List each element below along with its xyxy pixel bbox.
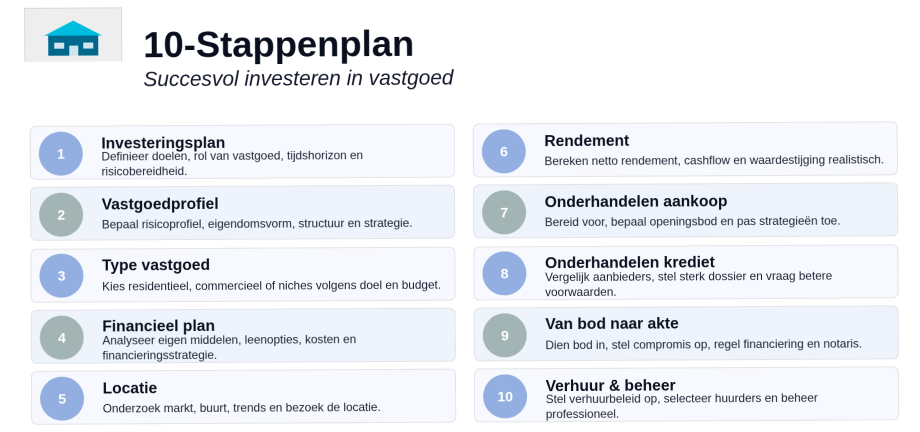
step 4 card — [31, 308, 456, 364]
step 10 card: 10 — [497, 388, 513, 404]
step 9 card: 9 — [501, 327, 509, 343]
step 10 card: Verhuur & beheer — [546, 377, 676, 395]
step 1 card: Investeringsplan — [101, 134, 225, 152]
header icon: house — [24, 7, 122, 62]
step 3 card: 3 — [58, 268, 66, 284]
step 7 card: Onderhandelen aankoop — [545, 193, 728, 211]
step 2 card: 2 — [57, 207, 65, 223]
step 3 card: Kies residentieel, commercieel of niches volgens doel en budget. — [102, 277, 441, 293]
step 5 card — [31, 369, 456, 425]
step 8 card — [473, 244, 899, 300]
step 4 card: Analyseer eigen middelen, leenopties, kosten en — [102, 332, 356, 348]
step 1 card: Definieer doelen, rol van vastgoed, tijdshorizon en — [101, 148, 363, 164]
step 7 card: Bereid voor, bepaal openingsbod en pas strategieën toe. — [545, 214, 841, 230]
step 3 card: Type vastgoed — [102, 257, 210, 275]
step 10 card: Stel verhuurbeleid op, selecteer huurders en beheer — [546, 391, 818, 407]
step 6 card: 6 — [500, 143, 508, 159]
step 4 card: Financieel plan — [102, 318, 215, 336]
step 2 card: Bepaal risicoprofiel, eigendomsvorm, structuur en strategie. — [102, 216, 413, 232]
step 9 card: Van bod naar akte — [545, 316, 679, 334]
title: 10-Stappenplan — [143, 23, 414, 65]
step 2 card: Vastgoedprofiel — [102, 196, 219, 213]
step 4 card: 4 — [58, 329, 66, 345]
step 10 card — [474, 366, 899, 423]
step 3 card — [30, 246, 456, 302]
step 7 card — [473, 183, 898, 239]
subtitle: Succesvol investeren in vastgoed — [143, 66, 454, 91]
step 9 card — [474, 305, 899, 361]
step 5 card: 5 — [58, 391, 66, 407]
step 8 card: Vergelijk aanbieders, stel sterk dossier en vraag betere — [545, 268, 832, 284]
step 8 card: voorwaarden. — [545, 285, 617, 299]
step 2 card — [30, 185, 455, 241]
step 1 card: risicobereidheid. — [101, 164, 187, 179]
step 7 card: 7 — [500, 204, 508, 220]
step 8 card: 8 — [501, 266, 509, 282]
step 1 card: 1 — [57, 145, 65, 161]
step 10 card: professioneel. — [546, 407, 619, 422]
step 5 card: Onderzoek markt, buurt, trends en bezoek de locatie. — [103, 400, 381, 416]
step 4 card: financieringsstrategie. — [102, 348, 217, 363]
step 9 card: Dien bod in, stel compromis op, regel financiering en notaris. — [545, 337, 862, 352]
step 6 card: Bereken netto rendement, cashflow en waardestijging realistisch. — [544, 153, 884, 168]
step 8 card: Onderhandelen krediet — [545, 254, 715, 272]
step 1 card — [30, 124, 455, 180]
step 5 card: Locatie — [103, 380, 157, 397]
step 6 card — [473, 121, 898, 178]
step 6 card: Rendement — [544, 132, 629, 150]
